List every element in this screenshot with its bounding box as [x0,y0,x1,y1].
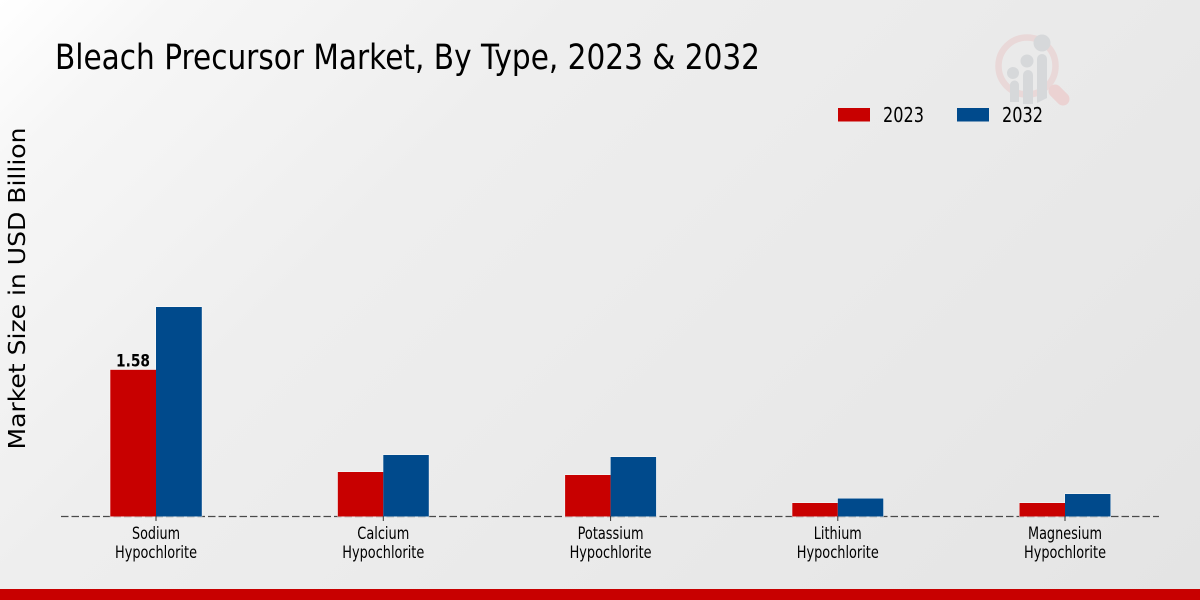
category labels: Hypochlorite [570,543,652,563]
category labels: Hypochlorite [115,543,197,563]
legend [838,103,1043,127]
legend 2032 label: 2032 [1002,103,1043,127]
bars: Magnesium Hypochlorite [1020,494,1110,516]
category labels: Hypochlorite [342,543,424,563]
category labels: Hypochlorite [797,543,879,563]
category labels: Calcium [357,524,409,544]
category labels: Magnesium [1028,524,1102,544]
bars: Calcium Hypochlorite [338,455,429,516]
watermark logo [998,34,1063,104]
category labels: Sodium [132,524,180,544]
category labels: Lithium [814,524,862,544]
legend 2032 swatch [957,108,989,122]
title: Bleach Precursor Market, By Type, 2023 & 2032 [55,38,760,78]
category labels: Hypochlorite [1024,543,1106,563]
footer band [0,589,1200,600]
bars: Potassium Hypochlorite [565,457,656,516]
category labels [115,524,1106,563]
baseline [61,516,1159,518]
y axis title: Market Size in USD Billion [5,128,31,450]
legend 2023 swatch [838,108,870,122]
bar chart [61,307,1159,563]
bars: Sodium Hypochlorite [110,307,202,516]
bars: Lithium Hypochlorite [792,498,883,516]
value label: 1.58 [116,352,150,370]
category labels: Potassium [578,524,644,544]
legend 2023 label: 2023 [883,103,924,127]
